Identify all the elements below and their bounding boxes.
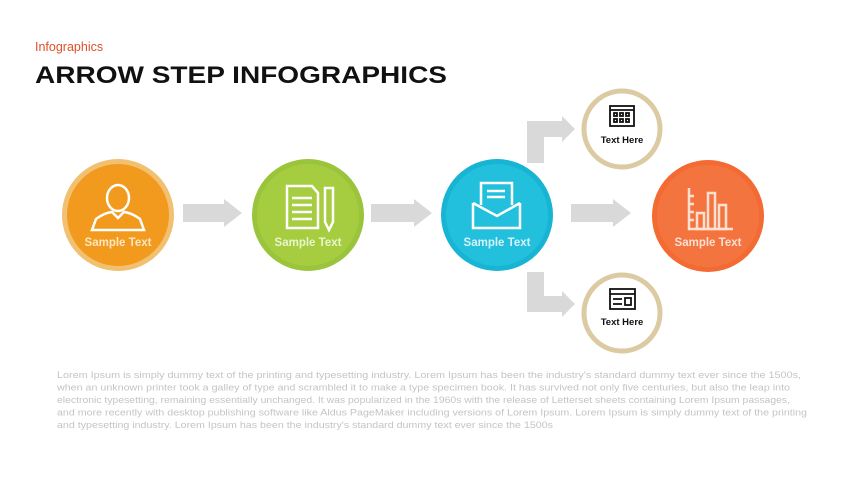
- icon: browser window: [610, 289, 635, 309]
- subtitle: Infographics: [35, 40, 103, 54]
- icon: document & pencil: [287, 186, 333, 230]
- title: ARROW STEP INFOGRAPHICS: [35, 62, 447, 89]
- body paragraph: Lorem Ipsum is simply dummy text of the printing and typesetting industry. Lorem Ipsum has been the industry's standard dummy text ever since the 1500s,: [57, 370, 801, 381]
- step 2: green circle: [252, 159, 364, 271]
- body paragraph: electronic typesetting, remaining essentially unchanged. It was popularized in the 1960s with the release of Letterset sheets containing Lorem Ipsum passages,: [57, 395, 790, 406]
- branch top: calendar circle: Text Here: [601, 135, 643, 146]
- branch bottom: browser circle: [584, 275, 660, 351]
- icon: user: [92, 185, 144, 230]
- step 1: orange circle: [62, 159, 174, 271]
- step 1: orange circle: Sample Text: [85, 237, 152, 249]
- icon: bar chart: [689, 188, 733, 229]
- icon: envelope: [473, 183, 520, 228]
- body paragraph: when an unknown printer took a galley of type and scrambled it to make a type specimen book. It has survived not only five centuries, but also the leap into: [56, 382, 790, 394]
- step 4: red circle: [652, 160, 764, 272]
- branch bottom: browser circle: Text Here: [601, 317, 643, 328]
- step 2: green circle: Sample Text: [275, 237, 342, 249]
- step 4: red circle: Sample Text: [675, 237, 742, 249]
- step 3: blue circle: Sample Text: [464, 237, 531, 249]
- body paragraph: and typesetting industry. Lorem Ipsum has been the industry's standard dummy text ever since the 1500s: [57, 420, 553, 431]
- arrow 1: [183, 199, 242, 227]
- body paragraph: [56, 370, 807, 431]
- step 3: blue circle: [441, 159, 553, 271]
- body paragraph: and more recently with desktop publishing software like Aldus PageMaker including versions of Lorem Ipsum. Lorem Ipsum is simply dummy text of the printing: [57, 408, 807, 418]
- arrow 3: [571, 199, 631, 227]
- branch top: calendar circle: [584, 91, 660, 167]
- arrow branch down: [527, 272, 575, 317]
- icon: calendar: [610, 106, 634, 126]
- arrow branch up: [527, 116, 575, 163]
- arrow 2: [371, 199, 432, 227]
